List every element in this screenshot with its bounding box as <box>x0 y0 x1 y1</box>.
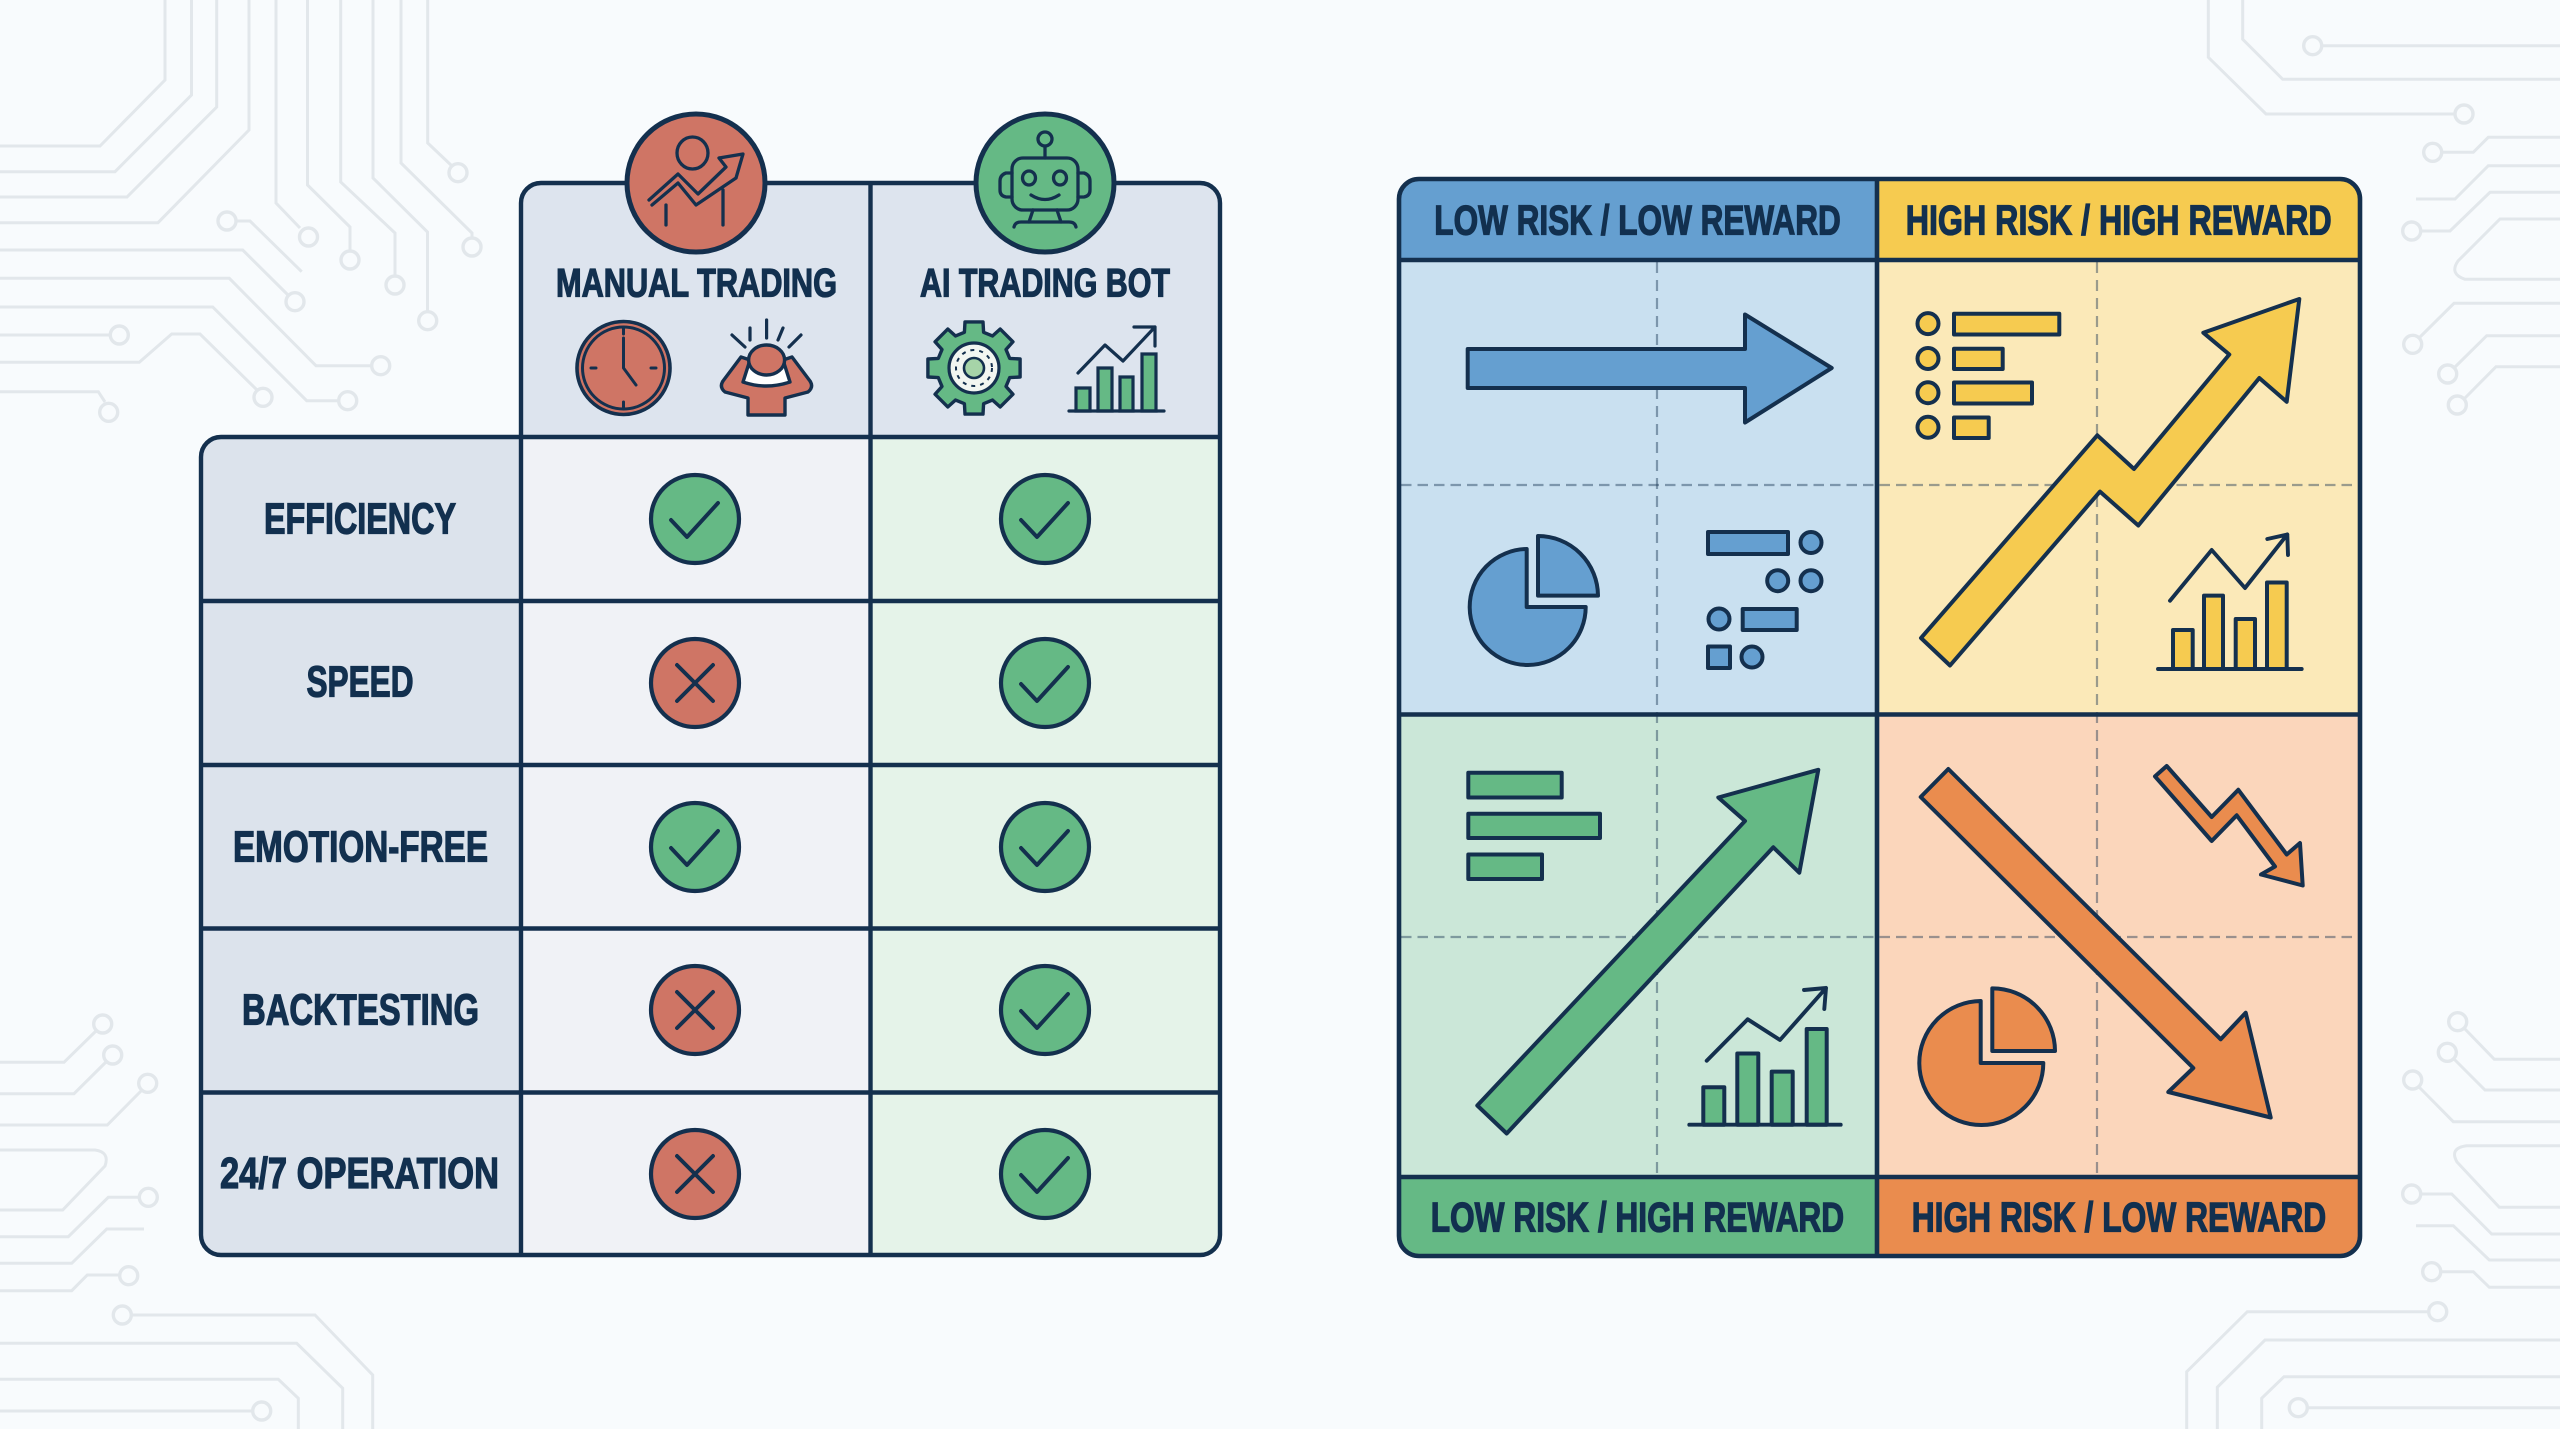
label: high risk high reward: HIGH RISK / HIGH REWARD <box>1906 196 2332 244</box>
column heading: manual trading icon <box>627 114 765 252</box>
icon: manual cross <box>651 639 739 727</box>
row: emotion-free: EMOTION-FREE <box>233 822 488 872</box>
panel: comparison table <box>201 114 1220 1255</box>
label: low risk high reward: LOW RISK / HIGH REWARD <box>1431 1194 1844 1240</box>
column heading: AI trading bot icon <box>976 114 1114 252</box>
matrix quadrant backgrounds <box>1399 179 2360 1256</box>
icon: manual check <box>651 803 739 891</box>
row: backtesting <box>242 966 1089 1054</box>
icon: yellow list <box>1918 313 2059 438</box>
icon: manual cross <box>651 966 739 1054</box>
icon: clock <box>577 322 670 414</box>
label: low risk low reward: LOW RISK / LOW REWARD <box>1434 196 1841 244</box>
icon: green bars <box>1468 773 1600 879</box>
icon: growth bar chart <box>1069 327 1164 411</box>
icon: bot check <box>1001 639 1089 727</box>
icon: bot check <box>1001 475 1089 563</box>
icon: blue legend blocks <box>1708 532 1822 668</box>
row: backtesting: BACKTESTING <box>242 986 479 1034</box>
icon: yellow mini chart <box>2158 534 2302 669</box>
panel: risk reward matrix <box>1399 179 2360 1256</box>
icon: bot check <box>1001 1130 1089 1218</box>
icon: manual cross <box>651 1130 739 1218</box>
label: high risk low reward: HIGH RISK / LOW REWARD <box>1912 1194 2326 1240</box>
arrow: falling orange <box>1921 769 2271 1118</box>
heading: AI trading bot: AI TRADING BOT <box>920 262 1170 306</box>
heading: manual trading: MANUAL TRADING <box>556 262 837 306</box>
icon: gear with chip <box>928 322 1020 414</box>
row: 24/7 operation: 24/7 OPERATION <box>220 1149 499 1198</box>
icon: orange pie chart <box>1919 988 2055 1125</box>
arrow: zigzag yellow <box>1921 299 2299 666</box>
arrow: flat blue <box>1468 314 1832 422</box>
icon: small orange zigzag arrow <box>2155 766 2303 886</box>
icon: stressed trader <box>721 320 812 415</box>
icon: manual check <box>651 475 739 563</box>
arrow: rising green <box>1477 770 1818 1134</box>
row: speed: SPEED <box>306 658 414 706</box>
icon: bot check <box>1001 966 1089 1054</box>
row: efficiency <box>264 475 1089 563</box>
icon: bot check <box>1001 803 1089 891</box>
icon: blue pie chart <box>1470 536 1598 665</box>
row: 24/7 operation <box>220 1130 1089 1218</box>
row: speed <box>306 639 1089 727</box>
icon: green mini chart <box>1689 988 1841 1125</box>
row: efficiency: EFFICIENCY <box>264 494 456 544</box>
row: emotion-free <box>233 803 1089 891</box>
table cell backgrounds <box>201 183 1220 1255</box>
